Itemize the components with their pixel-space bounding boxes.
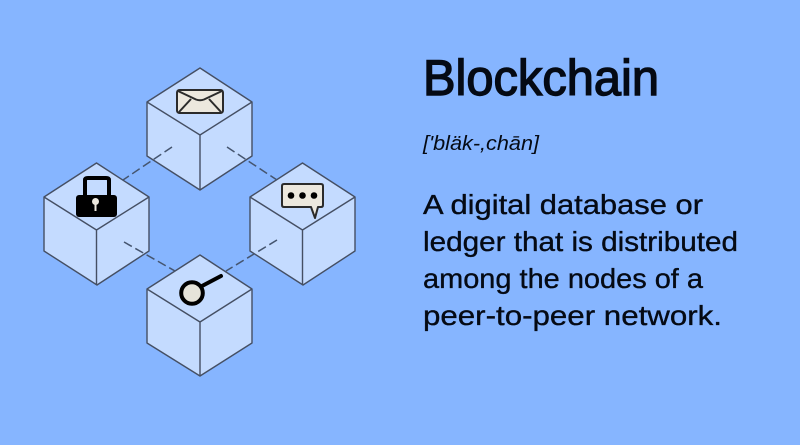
definition text: among the nodes of a: [423, 263, 703, 294]
icon: padlock: [76, 178, 117, 217]
definition text: [423, 189, 738, 331]
icon: speech bubble: [282, 184, 323, 218]
definition text: A digital database or: [423, 189, 703, 220]
definition text: ledger that is distributed: [423, 226, 738, 257]
cube: left with padlock: [44, 163, 149, 285]
cube: top with envelope: [147, 68, 252, 190]
title: Blockchain: [423, 50, 659, 106]
dashed connectors: [123, 147, 277, 271]
pronunciation: ['bläk-,chān]: [422, 133, 539, 155]
cube: right with speech bubble: [250, 163, 355, 285]
icon: envelope: [177, 90, 223, 113]
definition text: peer-to-peer network.: [423, 300, 722, 331]
icon: magnifying glass: [181, 276, 221, 304]
cube: bottom with magnifying glass: [147, 255, 252, 376]
